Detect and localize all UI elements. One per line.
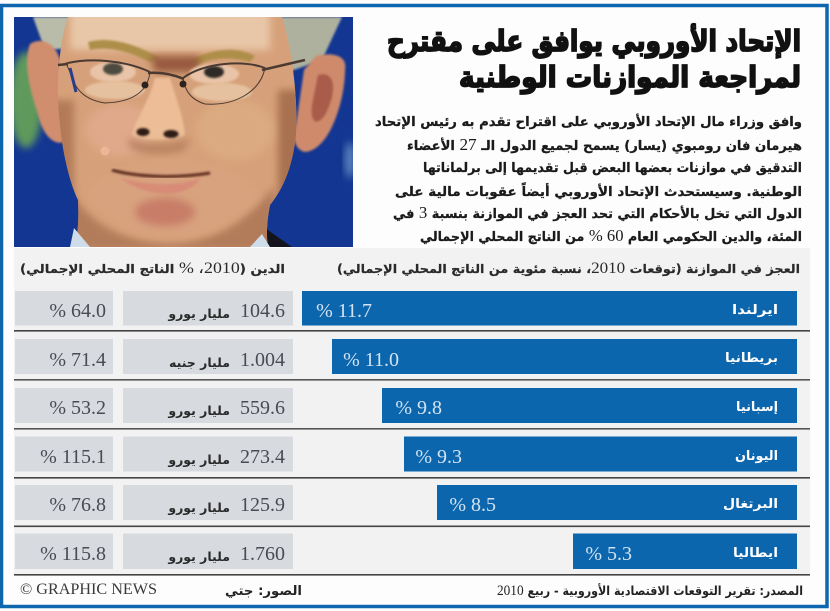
- row: Ireland: % 11.7: [316, 300, 372, 322]
- row: Ireland: [15, 291, 797, 326]
- row: Britain: % 11.0: [343, 349, 399, 371]
- row: Ireland: مليار يورو: [167, 306, 230, 321]
- row: Britain: بريطانيا: [725, 351, 778, 366]
- row: Spain: [15, 388, 797, 423]
- row: Portugal: % 8.5: [449, 494, 496, 516]
- body text block: هيرمان فان رومبوي (يسار) يسمح لجميع الدول الـ 27 الأعضاء: [407, 135, 802, 154]
- body text block: الدول التي تخل بالأحكام التي تحد العجز في الموازنة بنسبة 3 في: [393, 203, 802, 222]
- title: [387, 23, 801, 94]
- column heading: budget deficit: العجز في الموازنة (توقعات 2010، نسبة مئوية من الناتج المحلي الإجمالي): [337, 260, 800, 277]
- row: Greece: اليونان: [735, 449, 778, 464]
- footer: source: المصدر: تقرير التوقعات الاقتصادية الأوروبية - ربيع 2010: [497, 583, 803, 599]
- footer: copyright: © GRAPHIC NEWS: [20, 581, 157, 598]
- photo: portrait of Herman Van Rompuy: [9, 12, 355, 250]
- footer: photo credit: الصور: جتي: [225, 584, 302, 599]
- mouth: [112, 170, 210, 176]
- row: Greece: 273.4: [240, 446, 285, 468]
- row: Greece: 115.1 %: [40, 446, 106, 468]
- row: Italy: 115.8 %: [40, 543, 106, 565]
- row: Italy: مليار يورو: [167, 549, 230, 564]
- body text block: الوطنية. وسيستحدث الإتحاد الأوروبي أيضاً عقوبات مالية على: [395, 182, 802, 200]
- table background band: [14, 248, 810, 574]
- body text block: [375, 113, 802, 245]
- row: Ireland: ايرلندا: [732, 303, 778, 318]
- row: Portugal: البرتغال: [723, 497, 778, 512]
- mole: [100, 146, 110, 156]
- row: Portugal: 125.9: [240, 494, 285, 516]
- row: Spain: 53.2 %: [49, 397, 106, 419]
- eyes: [90, 62, 136, 82]
- row: Greece: مليار يورو: [167, 452, 230, 467]
- collar: [70, 228, 90, 247]
- jacket and collar: [267, 230, 292, 247]
- title: لمراجعة الموازنات الوطنية: [459, 60, 801, 94]
- body text block: المئة، والدين الحكومي العام 60 % من الناتج المحلي الإجمالي: [420, 226, 802, 245]
- hair: [32, 17, 68, 51]
- row: Spain: مليار يورو: [167, 403, 230, 418]
- row: Spain: % 9.8: [395, 397, 442, 419]
- ears: [27, 41, 64, 143]
- brows: [88, 40, 160, 62]
- body text block: وافق وزراء مال الإتحاد الأوروبي على اقتراح تقدم به رئيس الإتحاد: [375, 113, 802, 130]
- row: Italy: ايطاليا: [733, 546, 778, 561]
- row: Ireland: 64.0 %: [49, 300, 106, 322]
- row: Britain: 71.4 %: [49, 349, 106, 371]
- row: Greece: % 9.3: [415, 446, 462, 468]
- row: Greece: [15, 436, 797, 472]
- row: Portugal: [15, 485, 797, 520]
- row: Britain: [15, 339, 797, 374]
- row: Britain: 1.004: [240, 349, 285, 371]
- row: Portugal: مليار يورو: [167, 500, 230, 515]
- row: Italy: [15, 534, 797, 569]
- row: Italy: % 5.3: [585, 543, 632, 565]
- column heading: debt: الدين (2010، % الناتج المحلي الإجمالي): [20, 260, 285, 277]
- nose: [132, 78, 185, 140]
- row: Ireland: 104.6: [240, 300, 285, 322]
- row: Spain: إسبانيا: [736, 400, 778, 415]
- row: Portugal: 76.8 %: [49, 494, 106, 516]
- face: [58, 17, 296, 247]
- row: Italy: 1.760: [240, 543, 285, 565]
- row: Spain: 559.6: [240, 397, 285, 419]
- row: Britain: مليار جنيه: [169, 355, 230, 370]
- glasses: [58, 60, 305, 104]
- body text block: التدقيق في موازنات بعضها البعض قبل تقديمها إلى برلماناتها: [423, 161, 802, 176]
